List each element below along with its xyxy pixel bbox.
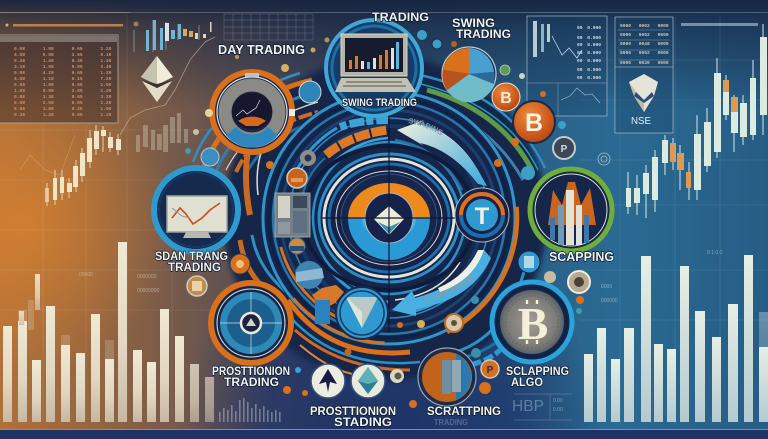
curved text in wheel: SWADING: [408, 118, 443, 135]
table panel: left: 0.58 1.98 0.65 1.50: [14, 82, 112, 88]
label: SWING TRADING upper right: SWING: [452, 16, 495, 30]
faded HBP table: 0.00: [553, 398, 563, 404]
label: TRADING top: TRADING: [372, 10, 429, 24]
icon: cream badge left: [187, 276, 207, 296]
small data notes: [79, 250, 723, 304]
bar chart: bottom left: [3, 242, 214, 422]
table panel: right upper chart: 00 0.000: [577, 25, 601, 31]
icon: small badge: [289, 238, 305, 254]
grid panel: top center left: [224, 14, 313, 40]
small data notes: 0 1.0.0: [707, 250, 723, 256]
icon: P coin bottom: P: [487, 365, 494, 376]
faded HBP table: [512, 394, 572, 420]
circle: T coin: [455, 188, 509, 242]
icon: small P coin: P: [561, 144, 568, 155]
icon: gear: [300, 150, 316, 166]
label: SWING TRADING upper right: [452, 16, 511, 41]
white inner ring: [324, 159, 454, 277]
table panel: right NSE: 0000 0052 0000: [620, 32, 669, 38]
small data notes: 00000: [79, 272, 93, 278]
label: SCLAPPING ALGO: ALGO: [511, 375, 543, 389]
left chart: faded background bars: [18, 274, 114, 380]
table panel: left: 4.08 0.98 3.65 9.10: [14, 52, 112, 58]
label: PROSTTIONION STADING: [310, 404, 396, 429]
faded HBP table: 0.00: [553, 407, 563, 413]
icon: ethereum diamond: [141, 56, 173, 102]
table panel: right upper chart: [527, 16, 607, 116]
table panel: left: 5.08 1.98 0.25 1.90: [14, 106, 112, 112]
label: SDAN TRANG TRADING: SDAN TRANG: [155, 251, 228, 263]
table panel: right NSE: 0000 0048 0000: [620, 41, 669, 47]
curved text in wheel: [408, 118, 473, 302]
table panel: left: 0.38 1.28 0.65 1.20: [14, 112, 112, 118]
circle: swing pie chart: [442, 47, 496, 102]
small data notes: 000000: [601, 298, 618, 304]
table panel: left: [0, 35, 118, 123]
icon: orange badge: [287, 168, 307, 188]
decorative dots: [185, 30, 590, 408]
mini volume bars: [219, 398, 281, 422]
circle: green scalping: [528, 167, 614, 253]
center dial: orange and blue halves: [348, 183, 430, 218]
arrow: top curved: [397, 120, 487, 186]
table panel: right upper chart: 00 0.000: [577, 75, 601, 81]
small data notes: 0000000: [137, 274, 157, 280]
central wheel: [250, 79, 528, 357]
label: PROSTTIONION STADING: STADING: [334, 415, 392, 429]
icon: NSE gem: [629, 74, 658, 112]
circle: bitcoin coin large: [490, 280, 574, 364]
faded candles: center left: [136, 113, 188, 152]
bar chart: bottom right: [584, 255, 768, 422]
wheel outer rings: [250, 79, 528, 357]
icon: small P coin: [553, 137, 575, 159]
icon: orange small coin left: [230, 254, 250, 274]
icon: blue sphere: [295, 261, 324, 289]
circle: monitor: [152, 166, 240, 254]
label: SDAN TRANG TRADING: [155, 251, 228, 274]
label: PROSTTIONION TRADING: TRADING: [224, 375, 279, 389]
label: SCLAPPING ALGO: SCLAPPING: [506, 364, 569, 378]
candlestick chart: right: [626, 23, 767, 218]
table panel: right NSE: 0000 0030 0000: [620, 60, 669, 66]
table panel: right NSE: 0000 0002 0000: [620, 23, 669, 29]
circle: position trading: [208, 280, 294, 366]
icon: target: [598, 153, 610, 165]
candlestick chart: upper left small: [134, 20, 212, 52]
table panel: right NSE: 0000 0052 0000: [620, 50, 669, 56]
candlestick chart: lower left rising: [20, 125, 121, 206]
circle: scratching chart: [418, 348, 476, 406]
table panel: left: 0.28 1.48 0.35 1.20: [14, 58, 112, 64]
label: SCRATTPING: SCRATTPING: [427, 404, 501, 418]
circle: laptop swing trading: [326, 20, 422, 116]
circle: day trading gauge: [205, 69, 295, 155]
table panel: left: 0.08 2.98 0.65 1.20: [14, 100, 112, 106]
label: NSE: NSE: [631, 116, 651, 127]
table panel: left: 0.08 1.98 0.65 1.20: [14, 46, 112, 52]
table panel: left: 1.08 0.98 2.65 1.20: [14, 88, 112, 94]
small gem badge edge: [390, 369, 404, 383]
table panel: right NSE: [615, 17, 673, 133]
curved text in wheel: TOADPAINNDS: [424, 275, 473, 302]
icon: center diamond: [374, 206, 404, 235]
table panel: right upper chart: 00 0.000: [577, 42, 601, 48]
orange block arc: [326, 130, 387, 155]
label: SCAPPING: SCAPPING: [549, 250, 614, 264]
icon: dark spade badge: [311, 364, 345, 398]
big dark disc behind central wheel: [223, 56, 547, 380]
label: SWING TRADING upper right: TRADING: [456, 27, 511, 41]
label: PROSTTIONION TRADING: [212, 364, 290, 389]
icon: teal gem badge: [351, 364, 385, 398]
table panel: right upper chart: 00 0.000: [577, 35, 601, 41]
icon: data panel: [275, 193, 310, 237]
circle: diamond gem: [336, 287, 388, 339]
table panel: left: 4.08 1.18 0.15 7.20: [14, 76, 112, 82]
table panel: left: 0.98 4.28 0.65 1.20: [14, 70, 112, 76]
table panel: right upper chart: 00 0.000: [577, 67, 601, 73]
circle: bitcoin coin large: B: [518, 298, 548, 349]
orange shape: [312, 285, 344, 310]
arrow: bottom curved: [392, 250, 491, 316]
table panel: left: 0.88 1.38 0.65 3.20: [14, 94, 112, 100]
icon: bitcoin large: B: [525, 109, 543, 137]
circle: T coin: T: [475, 203, 490, 230]
small data notes: 0000: [601, 284, 612, 290]
table panel: right upper chart: 00 0.000: [577, 58, 601, 64]
label: SWING TRADING on laptop: SWING TRADING: [342, 97, 417, 109]
trend line: left: [120, 37, 215, 135]
table panel: left: 3.18 1.98 0.95 3.40: [14, 64, 112, 70]
outer swirl arcs: [193, 73, 545, 376]
label: PROSTTIONION STADING: PROSTTIONION: [310, 404, 396, 418]
icon: bitcoin small: [492, 83, 520, 111]
icon: monitor chart: [167, 196, 227, 238]
icon: bitcoin large: [513, 101, 555, 143]
inner mid rings: [313, 142, 465, 294]
table panel: right upper chart: 00 0.000: [577, 50, 601, 56]
label: SCLAPPING ALGO: [506, 364, 569, 389]
label: PROSTTIONION TRADING: PROSTTIONION: [212, 364, 290, 378]
label: DAY TRADING: DAY TRADING: [218, 42, 305, 57]
label: SDAN TRANG TRADING: TRADING: [168, 262, 221, 274]
faint label under SCRATTPING: TRADING: [434, 418, 468, 427]
icon: bitcoin small: B: [500, 90, 512, 107]
faded HBP table: HBP: [512, 398, 544, 415]
top left progress bar: [6, 24, 123, 26]
icon: laptop: [335, 34, 416, 92]
small data notes: 00000000: [137, 288, 159, 294]
icon: P coin bottom: [481, 360, 499, 378]
